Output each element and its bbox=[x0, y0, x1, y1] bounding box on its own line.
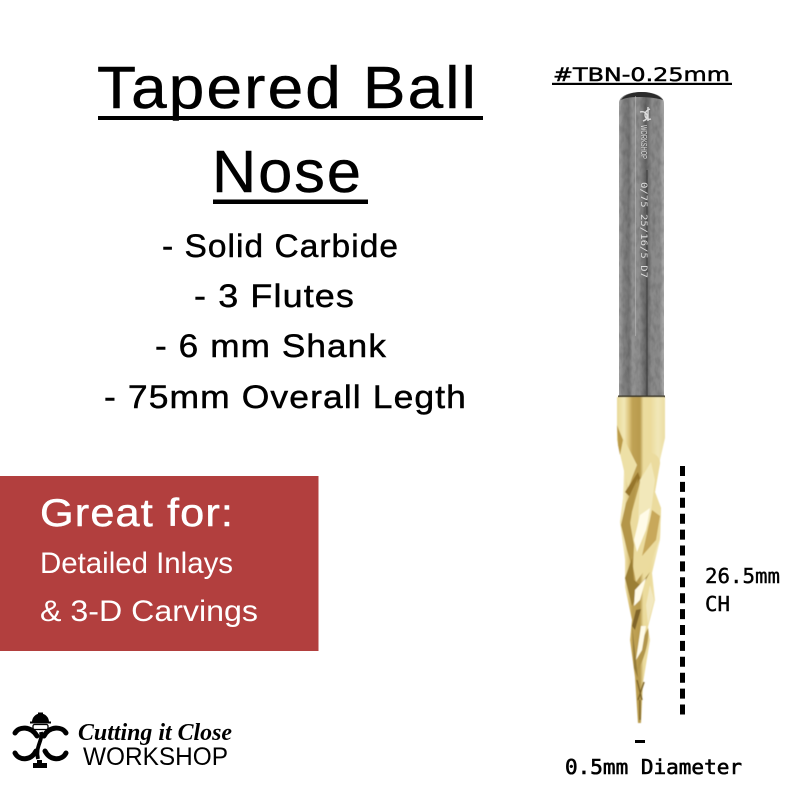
panel: great for bbox=[0, 476, 318, 651]
dark flute strips bbox=[625, 472, 640, 497]
shank: WORKSHOP bbox=[639, 125, 648, 159]
specification list: - 3 Flutes bbox=[194, 278, 355, 314]
specification list: - 75mm Overall Legth bbox=[104, 379, 467, 415]
specification list: - 6 mm Shank bbox=[155, 328, 387, 364]
white gaps bbox=[634, 508, 650, 552]
cutting height label: 26.5mm bbox=[705, 564, 780, 588]
lower twist bbox=[646, 585, 654, 624]
title: Tapered Ball bbox=[97, 55, 478, 121]
specification list bbox=[104, 228, 467, 415]
title: Nose bbox=[212, 139, 363, 205]
logo: Cutting it Close Workshop bbox=[15, 712, 232, 771]
title bbox=[97, 55, 483, 205]
panel: great for: Detailed Inlays bbox=[40, 547, 233, 580]
panel: great for: Great for: bbox=[40, 492, 234, 535]
logo wordmark: Cutting it Close bbox=[78, 720, 232, 746]
panel: great for: & 3-D Carvings bbox=[40, 595, 258, 628]
part number: #TBN-0.25mm bbox=[553, 64, 730, 86]
tip diameter label: 0.5mm Diameter bbox=[565, 755, 742, 779]
flat relief face bbox=[617, 425, 637, 488]
logo: Cutting it Close Workshop: WORKSHOP bbox=[83, 743, 228, 771]
tip diameter label bbox=[565, 740, 742, 779]
shank: 0/75 25/16/5 D7 bbox=[638, 182, 648, 278]
cutting height label bbox=[705, 564, 780, 616]
specification list: - Solid Carbide bbox=[162, 228, 399, 264]
cutting height label: CH bbox=[705, 592, 730, 616]
cutting height dimension line bbox=[680, 466, 685, 720]
icon: tapered ball nose end mill bbox=[617, 92, 665, 723]
shank bbox=[618, 92, 665, 398]
gold cutting section bbox=[617, 397, 665, 723]
icon: logo mark bbox=[15, 712, 66, 768]
main flute bbox=[628, 453, 661, 582]
